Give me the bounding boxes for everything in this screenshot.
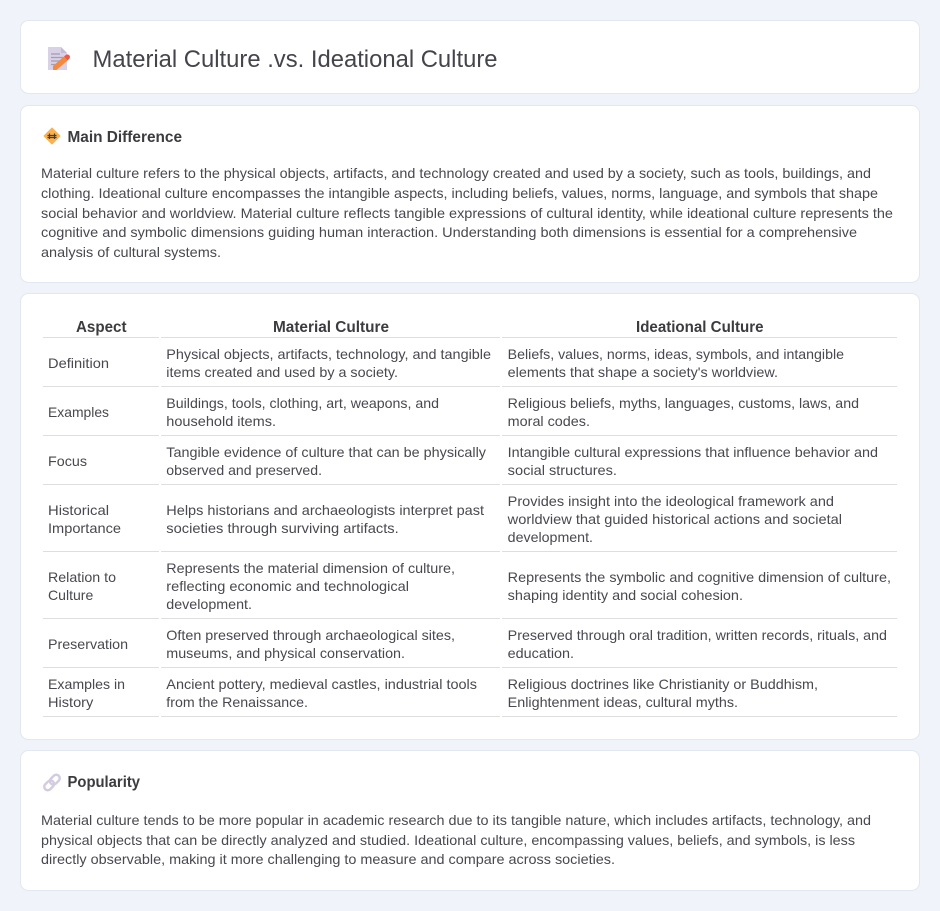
table row: focus: Focus <box>48 453 87 469</box>
text block: main difference paragraph: analysis of cultural systems. <box>41 244 221 260</box>
table row: examples in history: Ancient pottery, medieval castles, industrial tools <box>166 676 477 692</box>
text block: main difference paragraph: social behavior and worldview. Material culture reflects tangible expressions of cultural identity, while ideational culture represents the <box>41 205 893 221</box>
table row: focus <box>48 444 878 478</box>
text block: popularity paragraph <box>41 812 871 867</box>
table row: definition: items created and used by a society. <box>166 364 398 380</box>
table row: examples: Religious beliefs, myths, languages, customs, laws, and <box>508 395 859 411</box>
table row: examples: moral codes. <box>508 413 590 429</box>
table row: relation to culture: shaping identity and social cohesion. <box>508 587 743 603</box>
text block: popularity paragraph: physical objects that can be directly analyzed and studied. Ideational culture, encompassing values, beliefs, and symbols, is less <box>41 832 855 848</box>
table row: historical importance: Historical <box>48 502 109 518</box>
table row: focus: social structures. <box>508 462 617 478</box>
text block: main difference paragraph: Material culture refers to the physical objects, artifacts, and technology created and used by a society, such as tools, buildings, and <box>41 165 871 181</box>
panel: title header <box>20 20 920 94</box>
table row: preservation: Often preserved through archaeological sites, <box>166 627 455 643</box>
table row: historical importance: development. <box>508 529 593 545</box>
text block: popularity paragraph: Material culture tends to be more popular in academic research due to its tangible nature, which includes artifacts, technology, and <box>41 812 871 828</box>
table row: preservation: Preservation <box>48 636 128 652</box>
panel: comparison table <box>20 294 920 740</box>
table row: preservation: museums, and physical conservation. <box>166 645 405 661</box>
table row: focus: observed and preserved. <box>166 462 322 478</box>
title: Material Culture .vs. Ideational Culture <box>92 46 498 73</box>
table row: definition: Beliefs, values, norms, ideas, symbols, and intangible <box>508 346 844 362</box>
table row: definition: Physical objects, artifacts, technology, and tangible <box>166 346 491 362</box>
icon: chain link <box>43 773 61 792</box>
table row: definition: elements that shape a society's worldview. <box>508 364 778 380</box>
table header row: Ideational Culture <box>636 319 764 336</box>
table row: focus: Intangible cultural expressions that influence behavior and <box>508 444 878 460</box>
table row: relation to culture: reflecting economic and technological <box>166 578 409 594</box>
table row: examples in history: History <box>48 694 93 710</box>
heading: popularity: Popularity <box>68 774 140 791</box>
table row: historical importance: Importance <box>48 520 121 536</box>
table row: examples in history: Enlightenment ideas, cultural myths. <box>508 694 738 710</box>
table row: examples in history <box>48 676 818 710</box>
text block: main difference paragraph: clothing. Ideational culture encompasses the intangible aspects, including beliefs, values, norms, language, and symbols that shape <box>41 185 878 201</box>
table header row <box>76 319 764 336</box>
text block: main difference paragraph <box>41 165 893 260</box>
table row: examples <box>48 395 859 429</box>
table row: examples in history: Religious doctrines like Christianity or Buddhism, <box>508 676 818 692</box>
icon: document with pencil <box>48 47 70 70</box>
table row: definition: Definition <box>48 355 109 371</box>
table row: historical importance <box>48 493 842 545</box>
table row: relation to culture <box>48 560 891 612</box>
table row: relation to culture: Culture <box>48 587 94 603</box>
table row: preservation: Preserved through oral tradition, written records, rituals, and <box>508 627 887 643</box>
table row: examples: household items. <box>166 413 276 429</box>
table row: historical importance: Helps historians and archaeologists interpret past <box>166 502 484 518</box>
table row: examples in history: from the Renaissance. <box>166 694 308 710</box>
table row: relation to culture: development. <box>166 596 252 612</box>
table row: examples in history: Examples in <box>48 676 125 692</box>
table row: examples: Examples <box>48 404 109 420</box>
table row: preservation: education. <box>508 645 574 661</box>
icon: orange diamond <box>44 128 60 144</box>
table row: historical importance: societies through surviving artifacts. <box>166 520 399 536</box>
table row: historical importance: Provides insight into the ideological framework and <box>508 493 834 509</box>
text block: main difference paragraph: cognitive and symbolic dimensions guiding human interaction. Understanding both dimensions is essential for a comprehensive <box>41 224 857 240</box>
text block: popularity paragraph: directly observable, making it more challenging to measure and compare across societies. <box>41 851 615 867</box>
table row: preservation <box>48 627 887 661</box>
heading: main difference: Main Difference <box>68 129 182 146</box>
table row: focus: Tangible evidence of culture that can be physically <box>166 444 486 460</box>
table row: relation to culture: Represents the material dimension of culture, <box>166 560 455 576</box>
table header row: Aspect <box>76 319 127 336</box>
table row: definition <box>48 346 844 380</box>
panel: main difference <box>20 106 920 282</box>
table row: relation to culture: Represents the symbolic and cognitive dimension of culture, <box>508 569 891 585</box>
table header row: Material Culture <box>273 319 389 336</box>
table row: examples: Buildings, tools, clothing, art, weapons, and <box>166 395 439 411</box>
table row: historical importance: worldview that guided historical actions and societal <box>507 511 842 527</box>
table row: relation to culture: Relation to <box>48 569 116 585</box>
panel: popularity <box>20 750 920 890</box>
